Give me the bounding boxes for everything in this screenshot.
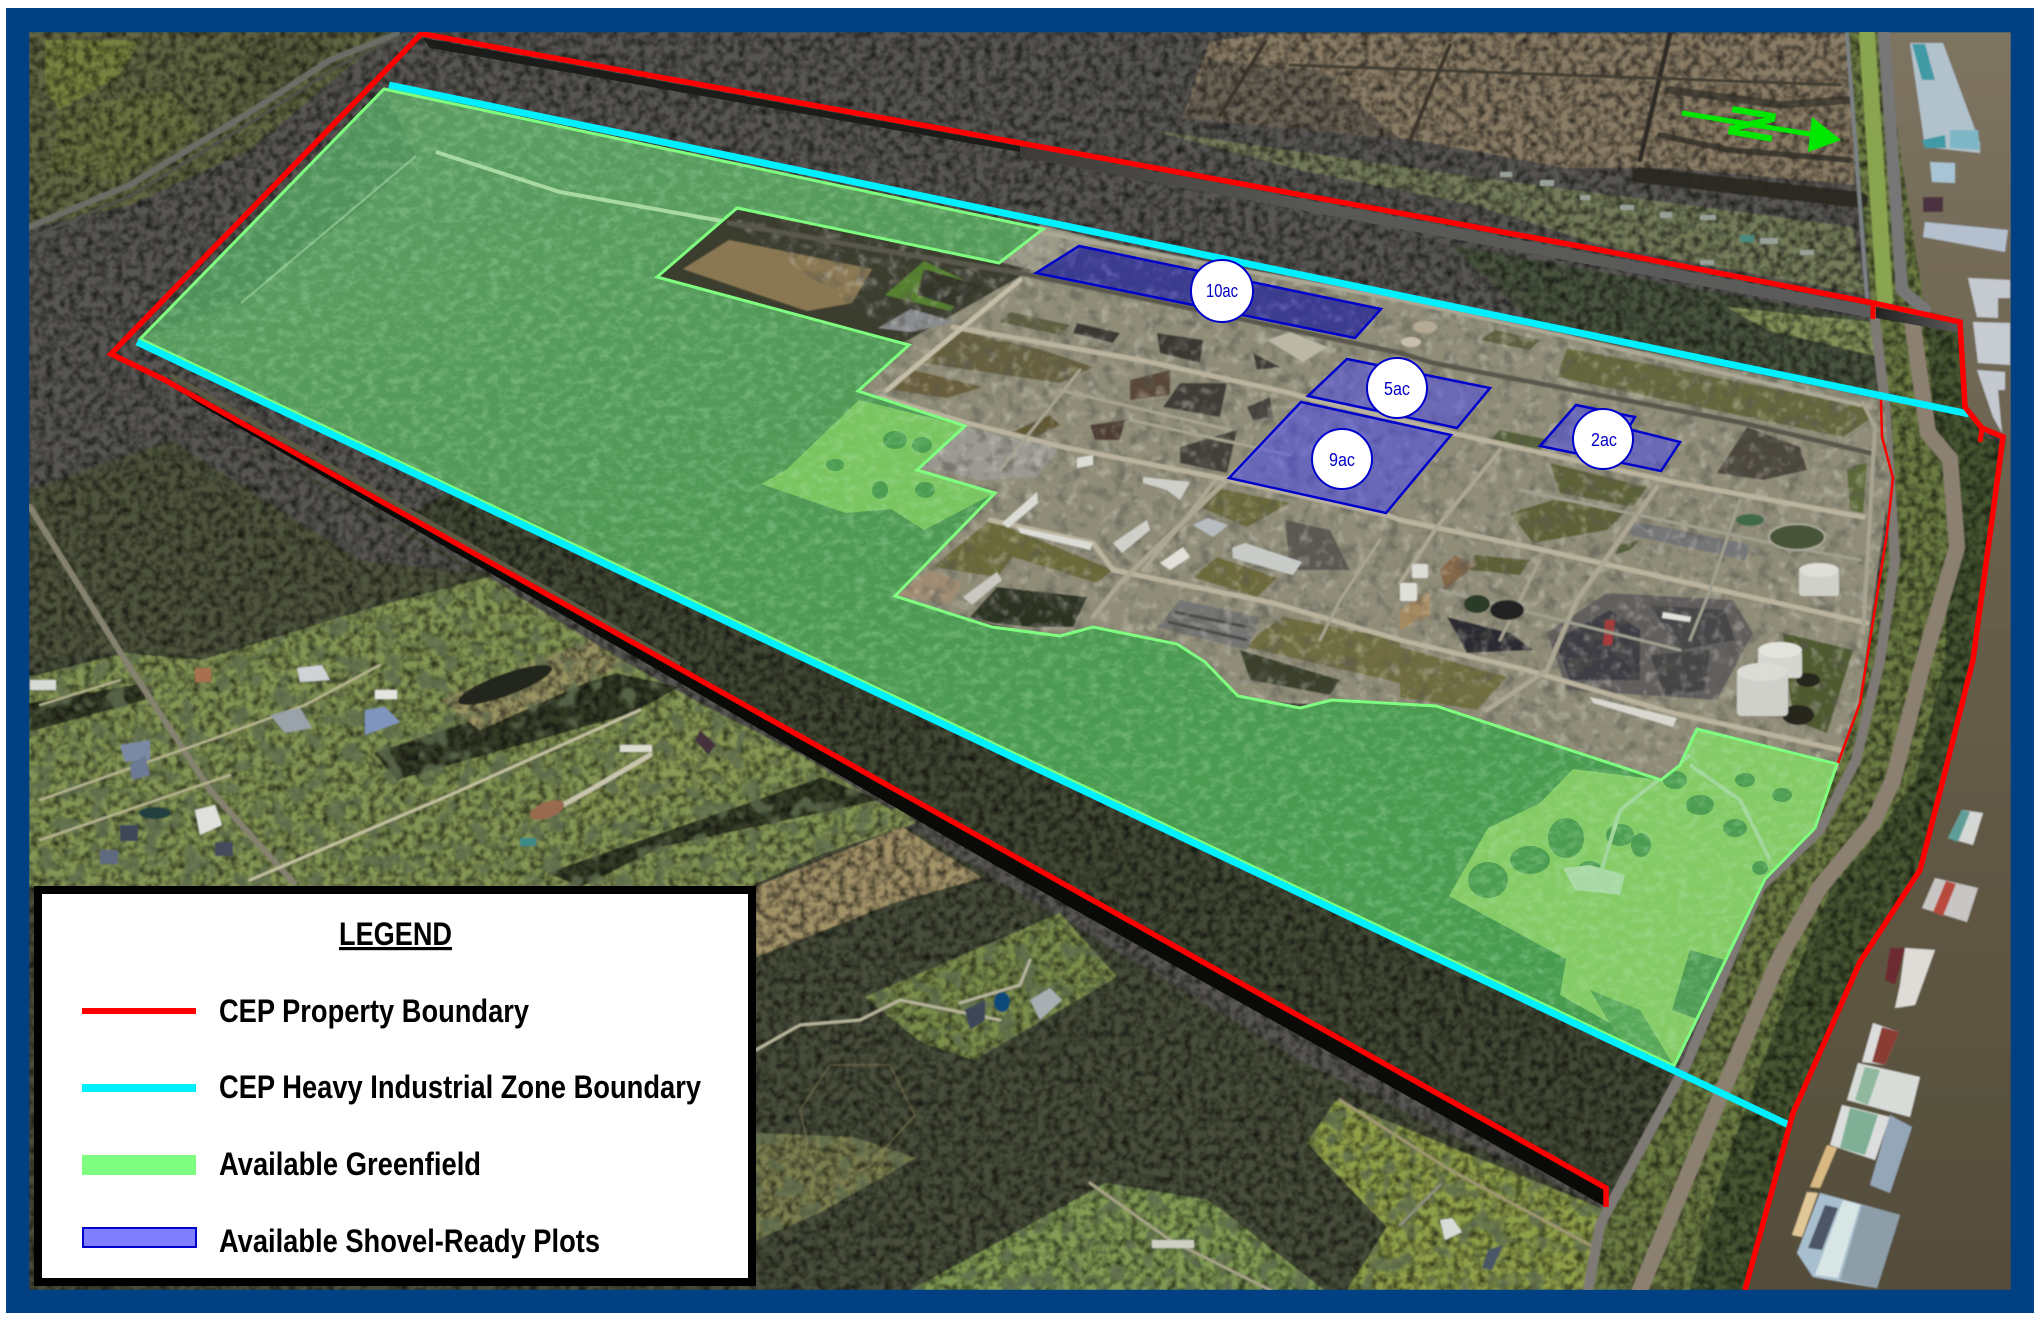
heavy industrial zone boundary	[137, 85, 1969, 1126]
legend title: LEGEND	[339, 916, 452, 952]
plot label: 2ac: 2ac	[1591, 430, 1617, 450]
tree blotches in fields	[29, 560, 1629, 1300]
legend row: heavy industrial zone: CEP Heavy Industrial Zone Boundary	[219, 1069, 701, 1105]
legend row: property boundary: CEP Property Boundary	[219, 993, 529, 1029]
plot label: 10ac	[1191, 260, 1253, 322]
plot: 9 acres	[1229, 402, 1451, 513]
barges	[1792, 43, 2010, 1288]
plot label: 5ac: 5ac	[1384, 379, 1410, 399]
plant buildings and tanks	[963, 321, 1839, 727]
village houses	[1500, 172, 1814, 265]
refinery units	[897, 323, 1807, 700]
north arrow	[1682, 100, 1841, 152]
legend row: greenfield: Available Greenfield	[219, 1146, 481, 1182]
plot: 2 acres	[1540, 405, 1680, 471]
legend row: shovel-ready plots: Available Shovel-Ready Plots	[219, 1223, 600, 1259]
plot label: 10ac: 10ac	[1206, 281, 1238, 301]
plant mottling	[734, 210, 1889, 778]
plot label: 9ac: 9ac	[1329, 450, 1355, 470]
chemical plant	[640, 190, 1900, 800]
legend row: shovel-ready plots	[83, 1223, 600, 1259]
north arrow: N	[1713, 100, 1789, 147]
river	[1745, 32, 2011, 1290]
plot label: 9ac	[1312, 429, 1372, 489]
shovel-ready plots	[1036, 246, 1680, 513]
houses and ponds	[30, 658, 1503, 1270]
shadows under property boundary	[163, 38, 1960, 1207]
plot label: 5ac	[1367, 358, 1427, 418]
greenfield outline	[140, 89, 1837, 1066]
legend panel	[38, 890, 752, 1282]
legend row: property boundary	[82, 993, 529, 1029]
legend row: greenfield	[82, 1146, 481, 1182]
greenfield fill	[130, 80, 1850, 1080]
plot label: 2ac	[1573, 409, 1633, 469]
plant fields	[893, 312, 1873, 733]
plot: 5 acres	[1308, 359, 1490, 428]
plot: 10 acres	[1036, 246, 1381, 338]
legend row: heavy industrial zone	[82, 1069, 701, 1105]
plant roads	[729, 223, 1875, 750]
